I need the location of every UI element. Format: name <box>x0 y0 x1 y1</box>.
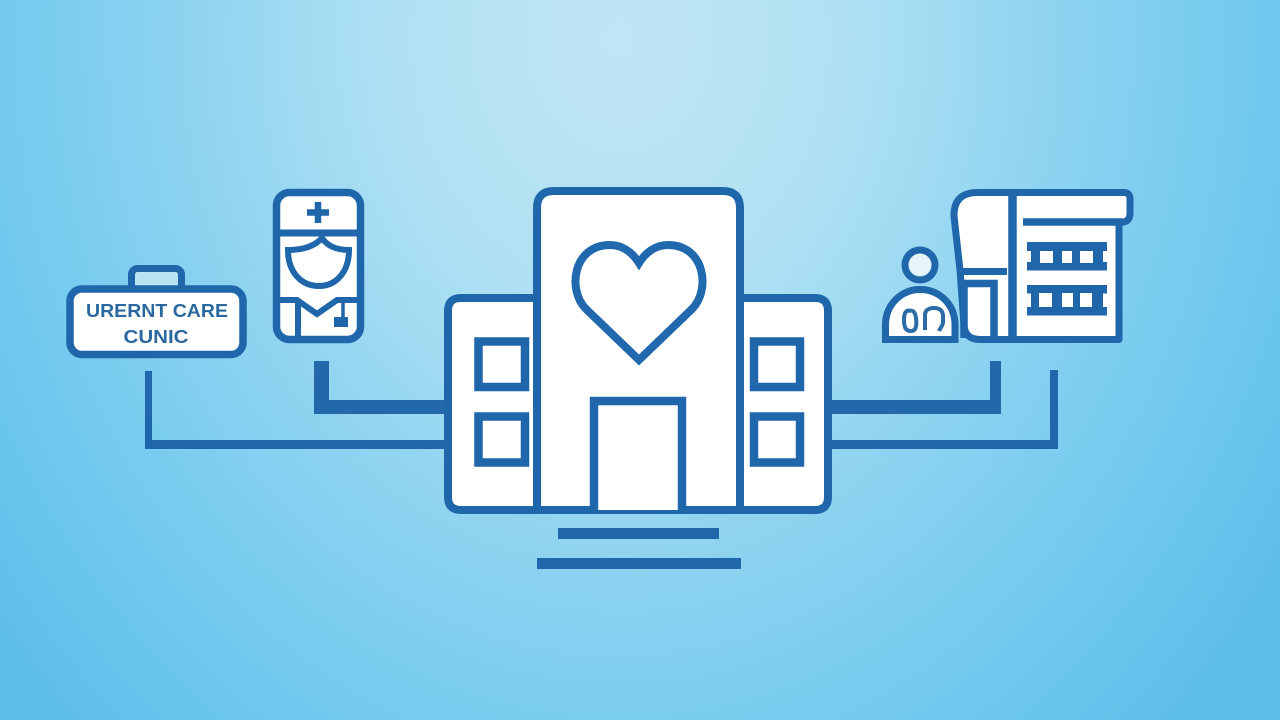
central tower <box>537 191 740 510</box>
right wing <box>738 298 828 510</box>
briefcase label line 1: URERNT CARE <box>86 300 228 321</box>
icon: heart <box>575 245 703 360</box>
ground line upper <box>558 528 719 539</box>
icon: person <box>886 250 955 340</box>
connector: urgent care clinic to hospital <box>145 371 446 449</box>
window: left lower <box>478 416 525 462</box>
shelves lower <box>1027 285 1107 316</box>
left wing <box>448 298 538 510</box>
connector: small clinic to hospital <box>830 361 1001 414</box>
window: right lower <box>754 416 800 462</box>
icon: hospital building <box>448 191 828 510</box>
ground line lower <box>537 558 741 569</box>
window: right upper <box>754 342 800 387</box>
icon: clinic building <box>954 192 1130 340</box>
connector: nurse to hospital <box>314 361 446 414</box>
briefcase label line 2: CUNIC <box>124 326 188 347</box>
shelves upper <box>1027 242 1107 270</box>
icon: nurse <box>276 192 361 340</box>
door <box>594 401 682 510</box>
icon: urgent care clinic briefcase <box>70 268 243 354</box>
window: left upper <box>478 342 525 387</box>
connector: far right building to hospital <box>830 370 1058 449</box>
